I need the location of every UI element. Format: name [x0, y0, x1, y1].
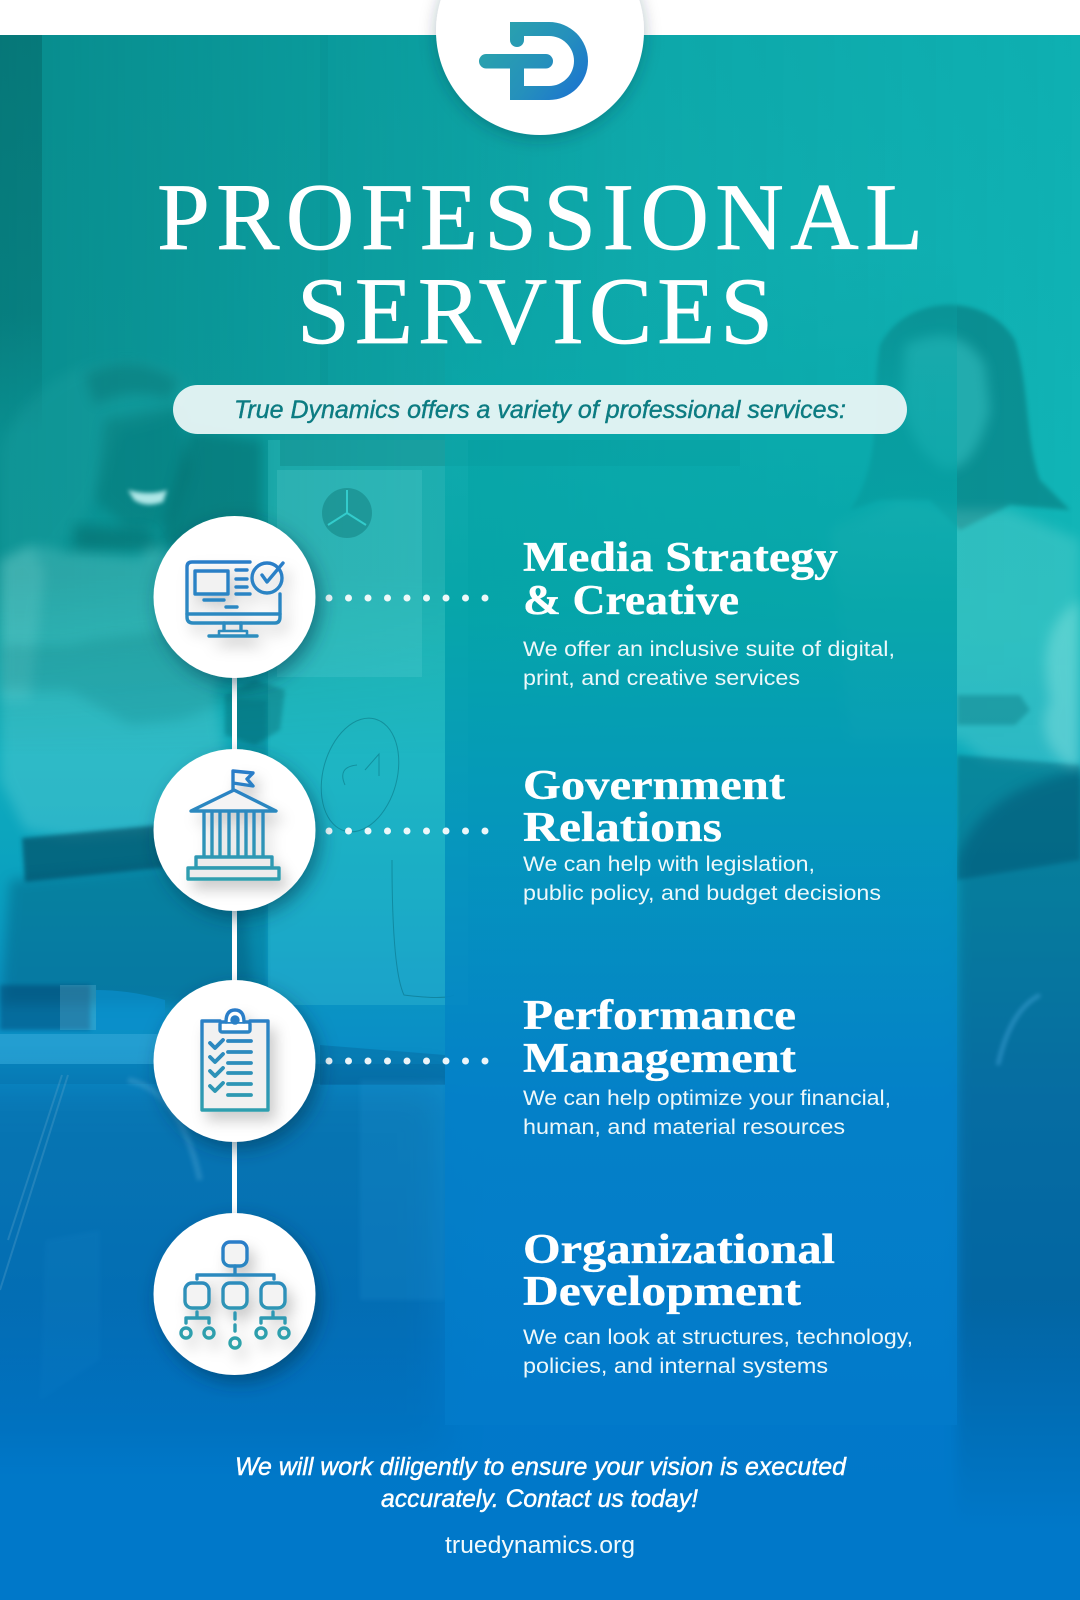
woman on the left [0, 358, 285, 1010]
text block: media strategy and creative [523, 535, 895, 690]
text block: organizational development: Organizational [523, 1227, 835, 1273]
blouse [957, 506, 1080, 769]
text block: performance management: Performance [523, 993, 796, 1039]
text block: organizational development: We can look at structures, technology, [523, 1325, 913, 1349]
text block: performance management: Management [523, 1036, 796, 1082]
icon: clipboard checklist [202, 1010, 268, 1110]
neck shadow [75, 525, 160, 550]
closing statement: accurately. Contact us today! [381, 1485, 698, 1513]
sleeve cuff hand [957, 695, 1030, 725]
title [157, 164, 929, 364]
sleeve highlight [0, 548, 45, 700]
icon: government building [188, 771, 279, 879]
dark wall behind head [160, 433, 264, 548]
intro pill [173, 385, 907, 434]
text block: media strategy and creative: print, and creative services [523, 666, 800, 690]
closing statement [235, 1453, 847, 1513]
text block: performance management [523, 993, 891, 1139]
badge circle [436, 0, 644, 135]
item: organizational development icon [154, 1213, 316, 1375]
text block: media strategy and creative: & Creative [523, 578, 739, 624]
text block: media strategy and creative: Media Strategy [523, 535, 838, 581]
text block: government relations: public policy, and budget decisions [523, 881, 881, 905]
hair [850, 305, 1070, 530]
title: SERVICES [297, 258, 778, 364]
text block: media strategy and creative: We offer an inclusive suite of digital, [523, 637, 895, 661]
shirt [0, 545, 240, 838]
dotted connectors [326, 594, 488, 1064]
top of hair [88, 363, 178, 402]
darker tint on the left side [0, 35, 699, 716]
text block: government relations: Government [523, 763, 785, 809]
logo badge [436, 0, 644, 135]
foreground person [957, 770, 1080, 1560]
text block: organizational development: policies, and internal systems [523, 1354, 828, 1378]
hair [0, 358, 190, 555]
white header band [0, 0, 1080, 35]
closing statement: We will work diligently to ensure your vision is executed [235, 1453, 847, 1481]
text block: organizational development: Development [523, 1269, 801, 1315]
wall beside legs [237, 700, 268, 986]
foreground head [1044, 600, 1080, 770]
table and chairs lower left [0, 985, 445, 1460]
belt [20, 823, 164, 884]
smile [128, 490, 167, 505]
text block: performance management: We can help optimize your financial, [523, 1086, 891, 1110]
hand and phone [225, 680, 285, 745]
jeans [0, 858, 255, 1005]
item: performance management icon [154, 980, 316, 1142]
forearm [2, 634, 244, 724]
face [95, 405, 190, 530]
icon: monitor with check [187, 562, 283, 636]
woman on the right [830, 305, 1080, 1560]
skirt [957, 755, 1080, 880]
translucent content panel [445, 250, 957, 1425]
whiteboard [268, 440, 740, 1005]
title: PROFESSIONAL [157, 164, 929, 270]
item: government relations icon [154, 749, 316, 911]
face [902, 336, 990, 470]
intro pill: True Dynamics offers a variety of professional services: [234, 396, 846, 424]
text block: government relations: We can help with legislation, [523, 852, 815, 876]
website url: truedynamics.org [445, 1532, 635, 1559]
text block: government relations: Relations [523, 805, 722, 851]
icon: org chart [181, 1242, 289, 1348]
vertical connector line [232, 660, 237, 1240]
text block: organizational development [523, 1227, 913, 1378]
wall and window edge [0, 35, 328, 435]
text block: performance management: human, and material resources [523, 1115, 845, 1139]
text block: government relations [523, 763, 881, 905]
bottom fade to blue [0, 1349, 1080, 1530]
logo mark [479, 22, 588, 100]
item: media strategy icon [154, 516, 316, 678]
